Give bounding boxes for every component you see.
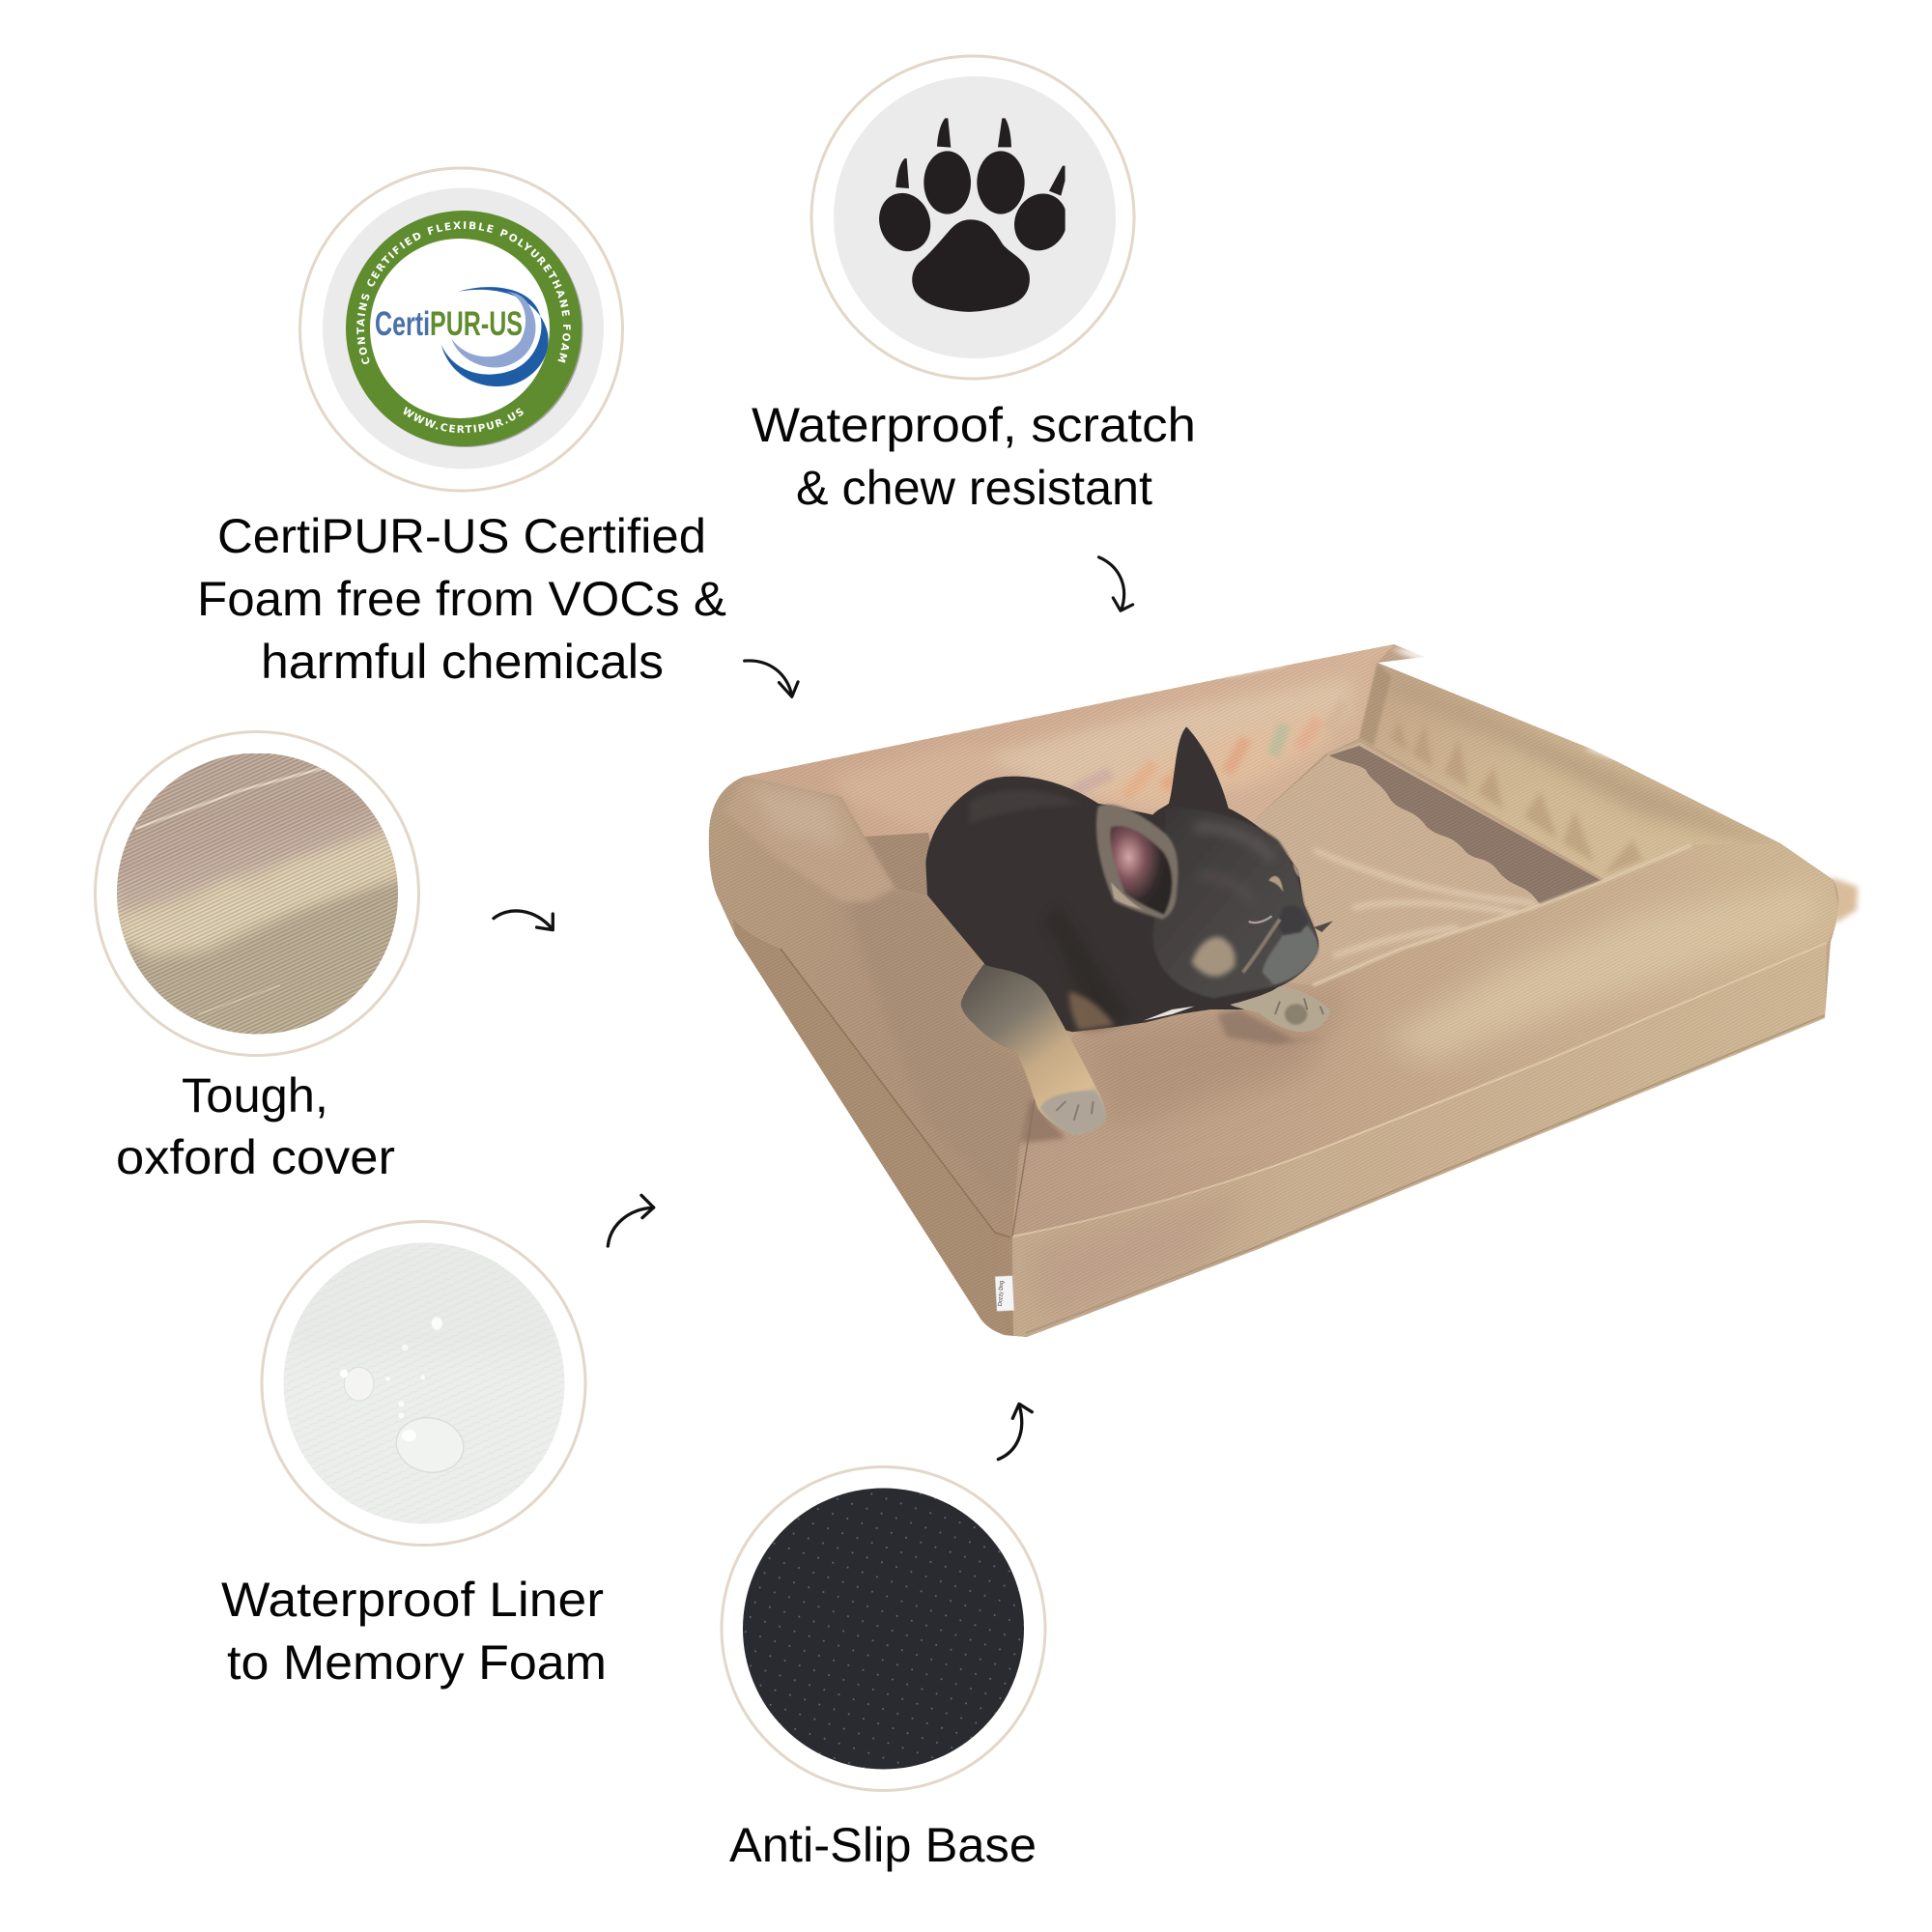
logo ring text — [356, 221, 571, 433]
heading: waterproof liner: to Memory Foam — [227, 1635, 607, 1690]
head shading — [1152, 808, 1318, 998]
logo wordmark: CertiPUR-US — [375, 305, 523, 343]
logo ring text: WWW.CERTIPUR.US — [404, 406, 524, 433]
nose — [1277, 905, 1309, 935]
dog body — [925, 726, 1319, 1032]
heading: waterproof liner — [221, 1573, 607, 1690]
heading: tough oxford cover: oxford cover — [116, 1130, 395, 1184]
rim inner edge — [1313, 845, 1691, 985]
foreleg — [961, 964, 1106, 1135]
heading: waterproof scratch and chew resistant: & chew resistant — [796, 461, 1152, 515]
panel: anti-slip base swatch — [722, 1466, 1045, 1791]
eye — [1249, 916, 1272, 923]
right paw — [1230, 987, 1330, 1032]
icon: paw with claws — [871, 118, 1076, 312]
back rim — [744, 644, 1394, 853]
heading: waterproof liner: Waterproof Liner — [221, 1573, 604, 1627]
front seam lower band — [1012, 1123, 1393, 1337]
heading: waterproof scratch and chew resistant: Waterproof, scratch — [752, 398, 1196, 452]
product photo: dog bed — [696, 628, 1864, 1352]
panel: paw icon badge — [811, 56, 1134, 379]
muzzle grey — [1263, 925, 1319, 984]
iridescent sheen — [1072, 700, 1345, 797]
panel: CertiPUR-US badge — [298, 166, 624, 493]
heading: tough oxford cover: Tough, — [182, 1068, 328, 1122]
arrow: oxford cover to bed — [494, 911, 553, 930]
soft cut-out edges — [1227, 647, 1613, 758]
wall folds — [1391, 720, 1642, 874]
icon: water droplets — [340, 1317, 468, 1478]
heading: CertiPUR-US Certified foam: Foam free from VOCs & — [197, 572, 726, 626]
logo ring text: CONTAINS CERTIFIED FLEXIBLE POLYURETHANE FOAM — [356, 221, 571, 364]
arrow: liner to bed — [608, 1195, 654, 1246]
belly tan patch — [1069, 992, 1114, 1031]
arrow: CertiPUR to bed — [745, 661, 798, 696]
heading: waterproof scratch and chew resistant — [752, 398, 1196, 515]
nose wrinkle — [1243, 920, 1280, 973]
label tag: Dozzy Dog — [998, 1281, 1005, 1306]
open ear — [1096, 805, 1179, 920]
fabric flare at corner — [1831, 877, 1858, 923]
panel: oxford fabric swatch — [95, 732, 419, 1055]
arrow: paw to bed — [1099, 557, 1133, 611]
chest highlight — [1143, 1007, 1195, 1021]
paw cast shadows — [1217, 1009, 1330, 1045]
heading: CertiPUR-US Certified foam — [197, 509, 726, 689]
front wall — [1012, 843, 1840, 1337]
heading: anti-slip base: Anti-Slip Base — [729, 1818, 1037, 1872]
heading: tough oxford cover — [116, 1068, 395, 1184]
logo swirl — [441, 287, 549, 386]
left wall and rim — [709, 777, 1035, 1337]
heading: CertiPUR-US Certified foam: harmful chemicals — [261, 635, 664, 689]
front toes — [1040, 1090, 1106, 1135]
dog — [925, 726, 1333, 1143]
right back wall — [1359, 663, 1780, 880]
body shading — [969, 790, 1082, 824]
heading: CertiPUR-US Certified foam: CertiPUR-US Certified — [217, 509, 706, 563]
bed floor — [1252, 742, 1539, 985]
arrow: base to bed — [998, 1404, 1032, 1460]
rim highlights — [1024, 884, 1821, 1323]
left lower seam — [733, 919, 1013, 1337]
lit rim flap — [724, 777, 895, 901]
tan cheek — [1191, 937, 1236, 977]
label tag — [995, 1276, 1014, 1311]
panel: waterproof liner swatch — [262, 1221, 585, 1546]
shadow area on left rim — [855, 898, 1035, 1195]
floor patch beside dog — [866, 833, 930, 895]
shadow on floor — [1329, 746, 1605, 906]
